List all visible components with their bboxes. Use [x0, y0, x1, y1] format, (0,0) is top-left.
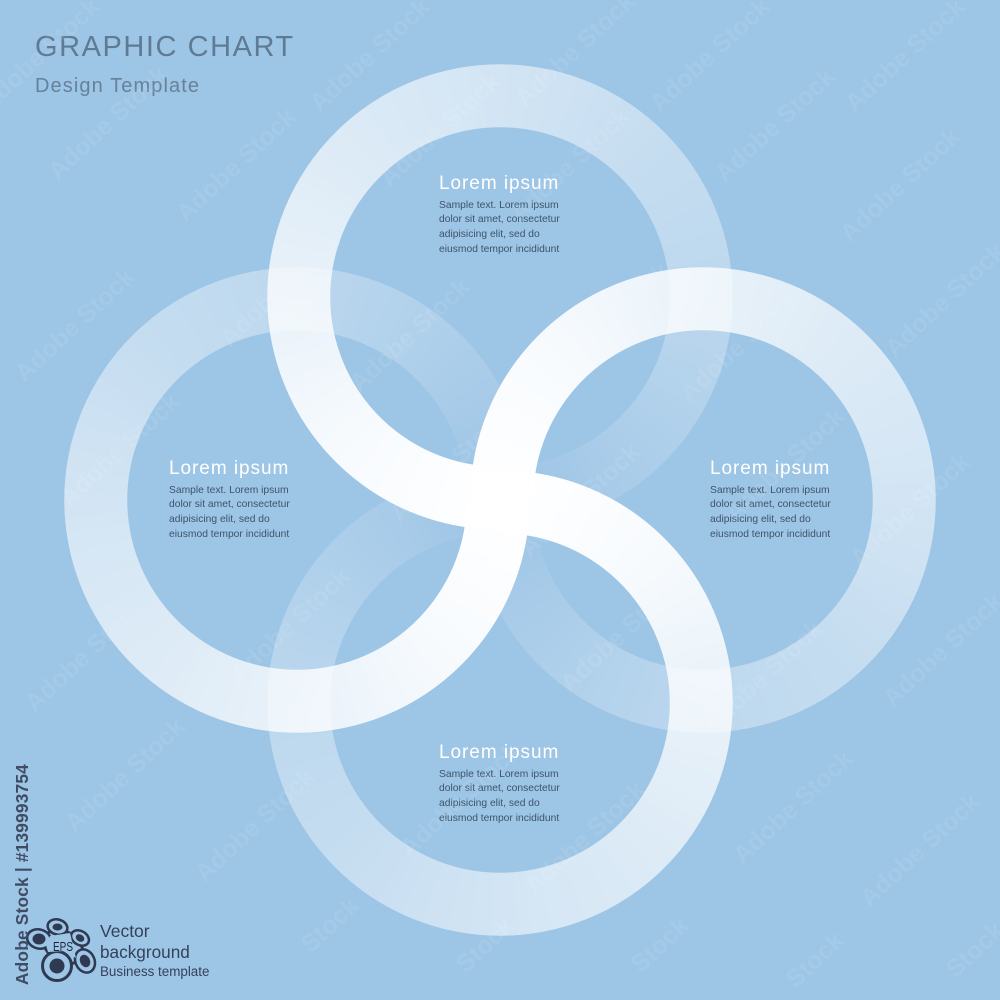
- watermark: Adobe Stock: [225, 563, 355, 687]
- watermark: Adobe Stock: [515, 438, 645, 562]
- watermark: Stock: [296, 892, 364, 958]
- watermark: Stock: [451, 912, 519, 978]
- vector background label: Vector: [100, 921, 150, 941]
- watermark: Adobe Stock: [215, 228, 345, 352]
- text block: left circle: eiusmod tempor incididunt: [169, 529, 289, 540]
- text block: left circle: adipisicing elit, sed do: [169, 514, 270, 525]
- watermark: Adobe Stock: [385, 403, 515, 527]
- watermark: Adobe Stock: [10, 263, 140, 387]
- text block: right circle: Sample text. Lorem ipsum: [710, 484, 830, 496]
- watermark: Adobe Stock: [190, 763, 320, 887]
- text block: right circle: adipisicing elit, sed do: [710, 514, 811, 525]
- text block: left circle: Sample text. Lorem ipsum: [169, 484, 289, 496]
- watermark: Adobe Stock: [395, 738, 525, 862]
- watermark: Adobe Stock: [520, 776, 650, 900]
- watermark: Adobe Stock: [505, 103, 635, 227]
- watermark: Adobe Stock: [20, 593, 150, 717]
- watermark: Adobe Stock: [545, 258, 675, 382]
- vector background label: [100, 921, 209, 979]
- text block: bottom circle: Lorem ipsum: [439, 742, 559, 763]
- ring: top: [267, 64, 733, 530]
- watermark: Adobe Stock: [845, 448, 975, 572]
- text block: right circle: eiusmod tempor incididunt: [710, 529, 830, 540]
- ring: bottom: [267, 470, 733, 936]
- watermark: Adobe Stock: [720, 403, 850, 527]
- ring: right: [470, 267, 936, 733]
- watermark: Adobe Stock: [698, 615, 828, 739]
- watermark: Adobe Stock: [345, 273, 475, 397]
- text block: top circle: [439, 173, 560, 255]
- watermark: Adobe Stock: [710, 63, 840, 187]
- text block: right circle: [710, 458, 831, 540]
- text: Adobe Stock | #139993754: [12, 764, 32, 985]
- watermark: Adobe Stock: [855, 788, 985, 912]
- icon: EPS logo: EPS: [53, 940, 73, 954]
- title: GRAPHIC CHART: [35, 31, 295, 63]
- text block: left circle: [169, 458, 290, 540]
- vector background label: background: [100, 942, 190, 962]
- text block: top circle: eiusmod tempor incididunt: [439, 244, 559, 255]
- watermark: Adobe Stock: [728, 745, 858, 869]
- text block: top circle: dolor sit amet, consectetur: [439, 214, 560, 225]
- watermark: Adobe Stock: [555, 573, 685, 697]
- text block: bottom circle: eiusmod tempor incididunt: [439, 813, 559, 824]
- watermark: Adobe Stock: [375, 68, 505, 192]
- watermark: Adobe Stock: [353, 603, 483, 727]
- watermark: Adobe Stock: [43, 61, 173, 185]
- text block: left circle: Lorem ipsum: [169, 458, 289, 479]
- watermark: Adobe Stock: [60, 713, 190, 837]
- text block: right circle: Lorem ipsum: [710, 458, 830, 479]
- text block: top circle: Sample text. Lorem ipsum: [439, 200, 559, 210]
- text block: bottom circle: dolor sit amet, consectetur: [439, 783, 560, 794]
- ring: left: [64, 267, 530, 733]
- text block: right circle: dolor sit amet, consectetur: [710, 499, 831, 510]
- text block: bottom circle: Sample text. Lorem ipsum: [439, 768, 559, 780]
- watermark: Adobe Stock: [675, 283, 805, 407]
- watermark: Stock: [626, 912, 694, 978]
- text block: top circle: adipisicing elit, sed do: [439, 229, 540, 240]
- vector background label: Business template: [100, 964, 209, 979]
- text block: bottom circle: [439, 742, 560, 824]
- watermark: Adobe Stock: [171, 103, 301, 227]
- subtitle: Design Template: [35, 75, 200, 97]
- icon: EPS logo: [26, 918, 96, 982]
- watermark: Adobe Stock: [835, 123, 965, 247]
- text block: top circle: Lorem ipsum: [439, 173, 559, 194]
- watermark: Stock: [781, 927, 849, 993]
- watermark: Adobe Stock: [55, 388, 185, 512]
- text block: bottom circle: adipisicing elit, sed do: [439, 798, 540, 809]
- text block: left circle: dolor sit amet, consectetur: [169, 499, 290, 510]
